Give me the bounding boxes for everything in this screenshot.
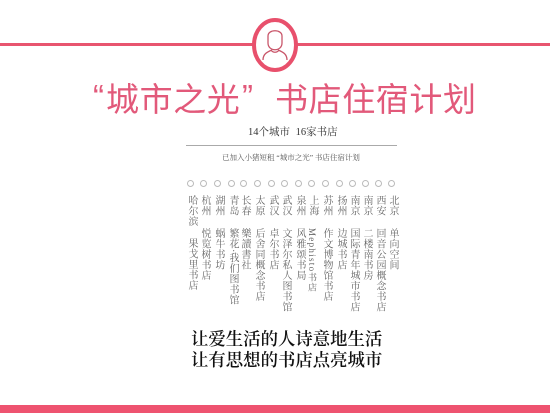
bottom bar <box>0 405 550 413</box>
title: ” <box>242 78 254 115</box>
Wuhan 1 <box>267 180 280 270</box>
icon: person badge <box>252 18 298 72</box>
Quanzhou: 泉州 <box>294 195 305 216</box>
Nanjing 1: 南京 <box>348 195 359 216</box>
title: 城市之光 <box>106 73 240 121</box>
Nanjing 2: 南京 <box>361 195 372 216</box>
Yangzhou: 扬州 <box>335 195 346 216</box>
divider <box>186 145 397 146</box>
Xi'an: 回音公园概念书店 <box>374 228 385 312</box>
Shanghai: 上海 <box>307 195 318 216</box>
Beijing: 单向空间 <box>387 228 398 270</box>
slogan: 让爱生活的人诗意地生活 <box>191 329 382 349</box>
Shanghai: Mephisto书店 <box>307 228 317 293</box>
Quanzhou <box>294 180 306 280</box>
Suzhou <box>321 180 334 302</box>
Harbin: 果戈里书店 <box>186 238 197 290</box>
Suzhou: 作文博物馆书店 <box>321 228 332 302</box>
Shanghai <box>307 180 320 293</box>
Wuhan 1: 武汉 <box>267 195 278 216</box>
Wuhan 1: 卓尔书店 <box>267 228 278 270</box>
Yangzhou <box>335 180 348 270</box>
Hangzhou <box>199 180 212 280</box>
Qingdao: 繁花·我们图书馆 <box>227 228 238 305</box>
Nanjing 2 <box>361 180 374 280</box>
Xi'an <box>374 180 386 312</box>
Hangzhou: 悦览树书店 <box>199 228 210 280</box>
title <box>93 73 477 121</box>
Beijing: 北京 <box>387 195 398 216</box>
Wuhan 2: 武汉 <box>280 195 291 216</box>
title: “ <box>93 78 105 115</box>
subtitle: 14个城市 16家书店 <box>248 127 338 138</box>
slogan: 让有思想的书店点亮城市 <box>191 350 382 370</box>
Harbin: 哈尔滨 <box>186 195 197 226</box>
Yangzhou: 边城书店 <box>335 228 346 270</box>
Nanjing 2: 二楼南书房 <box>361 228 372 280</box>
Qingdao: 青岛 <box>227 195 238 216</box>
Changchun <box>239 180 252 270</box>
Taiyuan: 太原 <box>253 195 264 216</box>
Hangzhou: 杭州 <box>199 195 210 216</box>
Harbin <box>186 180 198 290</box>
Xi'an: 西安 <box>374 195 385 216</box>
Wuhan 2 <box>280 180 292 312</box>
slogan <box>191 329 382 370</box>
Nanjing 1: 国际青年城市书店 <box>348 228 359 312</box>
Changchun: 长春 <box>239 195 250 216</box>
caption: 已加入小猪短租 “城市之光” 书店住宿计划 <box>222 153 360 162</box>
Huzhou: 蜗牛书坊 <box>213 228 224 270</box>
Wuhan 2: 文泽尔私人图书馆 <box>280 228 291 312</box>
Changchun: 樂讀書社 <box>239 228 250 270</box>
Beijing <box>387 180 400 270</box>
Huzhou: 湖州 <box>213 195 224 216</box>
Qingdao <box>227 180 240 305</box>
title: 书店住宿计划 <box>275 73 477 121</box>
Taiyuan <box>253 180 266 302</box>
Suzhou: 苏州 <box>321 195 332 216</box>
Taiyuan: 后舍同概念书店 <box>253 228 264 302</box>
Nanjing 1 <box>348 180 360 312</box>
top rule <box>0 43 550 46</box>
Quanzhou: 风雅颂书局 <box>294 228 305 280</box>
Huzhou <box>213 180 226 270</box>
